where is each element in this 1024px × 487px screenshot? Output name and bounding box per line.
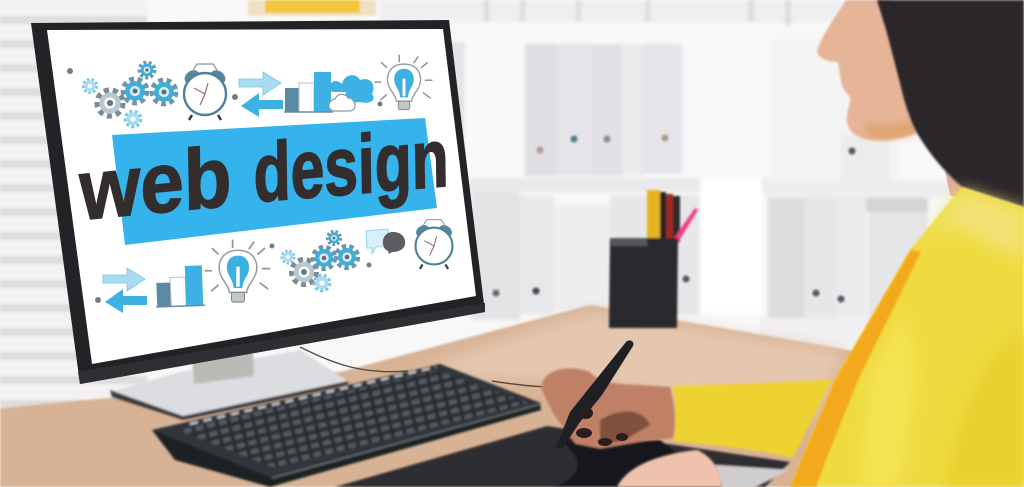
icon: bottom arrows: [103, 268, 147, 313]
icon: cloud: [329, 75, 374, 111]
right shelf unit: [770, 40, 900, 180]
top accent: blurred yellow object on shelf: [248, 0, 376, 16]
monitor screen: [47, 29, 476, 364]
woman: hair: [877, 0, 1024, 208]
icon: bottom gears: [282, 232, 358, 290]
pen holder with pencils: [609, 190, 698, 328]
woman: neck: [945, 170, 965, 200]
cable: [300, 347, 545, 387]
icon: top bar chart: [284, 72, 333, 112]
window blinds on the left: [0, 0, 147, 408]
icon: top arrows: [239, 72, 283, 117]
drawing tablet: [335, 426, 790, 487]
woman: yellow jacket: [790, 187, 1024, 487]
jacket collar highlight: [925, 190, 1024, 260]
heading: web design: [78, 112, 449, 239]
upper binders: [450, 42, 465, 172]
icon: bottom lightbulb: [205, 239, 270, 302]
desk highlight: [400, 312, 845, 420]
screen dots: [67, 68, 382, 303]
woman: resting hand: [617, 450, 722, 487]
stylus pen: [556, 340, 633, 449]
back shelves with white binders: [380, 0, 950, 348]
icon: top lightbulb: [375, 55, 432, 110]
woman: sleeve: [672, 379, 832, 458]
fingernails: [576, 407, 628, 446]
jacket shading: [860, 310, 914, 487]
monitor stand: [110, 350, 348, 420]
woman: face shading: [865, 120, 917, 139]
icon: bottom clock: [414, 220, 454, 269]
monitor bezel: [31, 20, 485, 384]
heading: web design: design: [253, 112, 449, 220]
woman: drawing hand: [541, 368, 675, 449]
keyboard: [152, 364, 541, 487]
binder holes: [492, 134, 856, 302]
woman: face: [817, 0, 917, 140]
lower binders: [472, 192, 520, 320]
icon: top gears: [84, 62, 176, 126]
jacket fold: [945, 330, 1024, 487]
top row: [380, 0, 840, 22]
heading: web design: web: [78, 129, 232, 239]
icon: chat bubbles: [366, 229, 405, 254]
blue text band: [112, 118, 437, 245]
monitor: [31, 20, 485, 384]
icon: bottom bar chart: [155, 265, 205, 307]
lower shelf ledge: [470, 178, 770, 192]
cork desk: [0, 305, 860, 487]
woman: orange lining: [790, 250, 921, 487]
icon: top clock: [182, 64, 228, 120]
